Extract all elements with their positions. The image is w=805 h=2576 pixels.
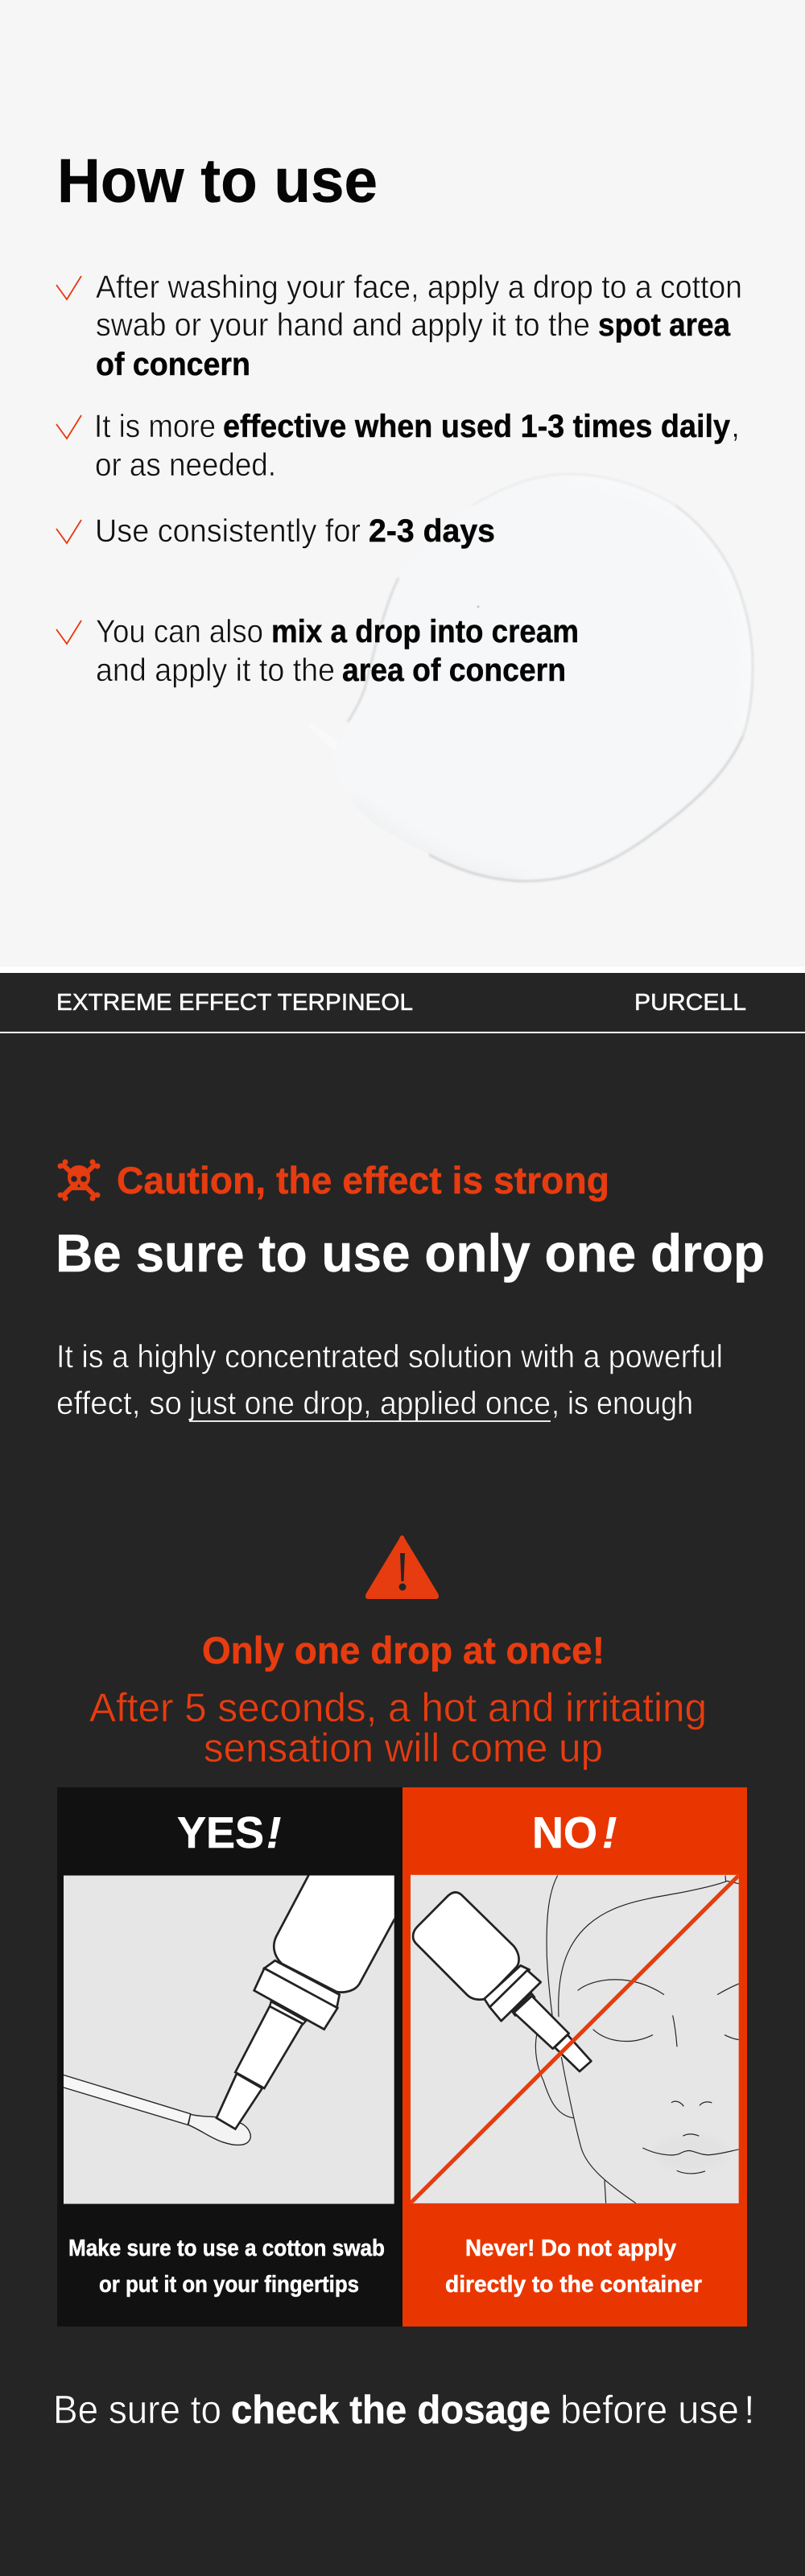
list item 4: You can also [96, 614, 263, 649]
caption: yes: or put it on your fingertips [99, 2272, 359, 2298]
closing line: check the dosage [231, 2388, 551, 2432]
list item 3: Use consistently for [95, 513, 361, 549]
list item 1: spot area [598, 307, 731, 343]
text block: description: , is enough [551, 1386, 693, 1421]
illustration: dropper on cotton swab [62, 1873, 397, 2204]
list item 1 [56, 270, 742, 382]
caption: no: Never! Do not apply [465, 2236, 676, 2261]
text block: description: just one drop, applied once [188, 1386, 551, 1421]
list item 2: effective when used 1-3 times daily [223, 409, 731, 444]
list item 2: or as needed. [95, 447, 276, 483]
list item 2 [56, 409, 740, 483]
label: yes: YES [177, 1807, 264, 1857]
list item 4: mix a drop into cream [271, 614, 579, 649]
label: yes: ! [266, 1807, 281, 1857]
panel: yes [57, 1787, 402, 2327]
closing line: before use [560, 2388, 739, 2432]
list item 1: of concern [96, 347, 250, 382]
warning text: After 5 seconds, a hot and irritating [89, 1685, 707, 1730]
panel: how to use [0, 0, 805, 973]
list item 2: It is more [94, 409, 216, 444]
list item 4 [56, 614, 579, 688]
caption: no [445, 2236, 702, 2298]
text block: description: It is a highly concentrated solution with a powerful [56, 1339, 723, 1375]
heading: one drop: Be sure to use only one drop [56, 1223, 765, 1283]
caption: yes [68, 2236, 385, 2298]
caption: yes: Make sure to use a cotton swab [68, 2236, 385, 2261]
heading: caution: Caution, the effect is strong [117, 1159, 609, 1201]
title: how to use: How to use [57, 146, 378, 216]
image: cream blob [309, 474, 753, 881]
text block: description: effect, so [56, 1386, 182, 1421]
icon: warning triangle [365, 1535, 439, 1599]
list item 2: , [731, 409, 740, 444]
label: no: ! [602, 1807, 617, 1857]
closing line [53, 2388, 755, 2432]
list item 1: After washing your face, apply a drop to a cotton [96, 270, 742, 305]
header bar [0, 990, 805, 1033]
warning heading: Only one drop at once! [202, 1629, 605, 1671]
text block: description [56, 1339, 723, 1422]
caption: no: directly to the container [445, 2272, 702, 2298]
panel: no [402, 1787, 747, 2327]
label: no: NO [532, 1807, 597, 1857]
header bar: PURCELL [634, 990, 746, 1016]
closing line: Be sure to [53, 2388, 221, 2432]
header bar: EXTREME EFFECT TERPINEOL [56, 990, 413, 1016]
warning text [89, 1685, 707, 1770]
list item 3: 2-3 days [369, 513, 495, 549]
icon: skull and crossbones [58, 1159, 100, 1201]
warning text: sensation will come up [204, 1725, 603, 1770]
list item 1: swab or your hand and apply it to the [96, 307, 590, 343]
list item 3 [56, 513, 495, 549]
list item 4: and apply it to the [96, 653, 335, 688]
closing line: ! [744, 2388, 755, 2432]
panel: caution section [0, 993, 805, 2432]
list item 4: area of concern [342, 653, 566, 688]
illustration: dropper near face crossed out [410, 1875, 739, 2203]
